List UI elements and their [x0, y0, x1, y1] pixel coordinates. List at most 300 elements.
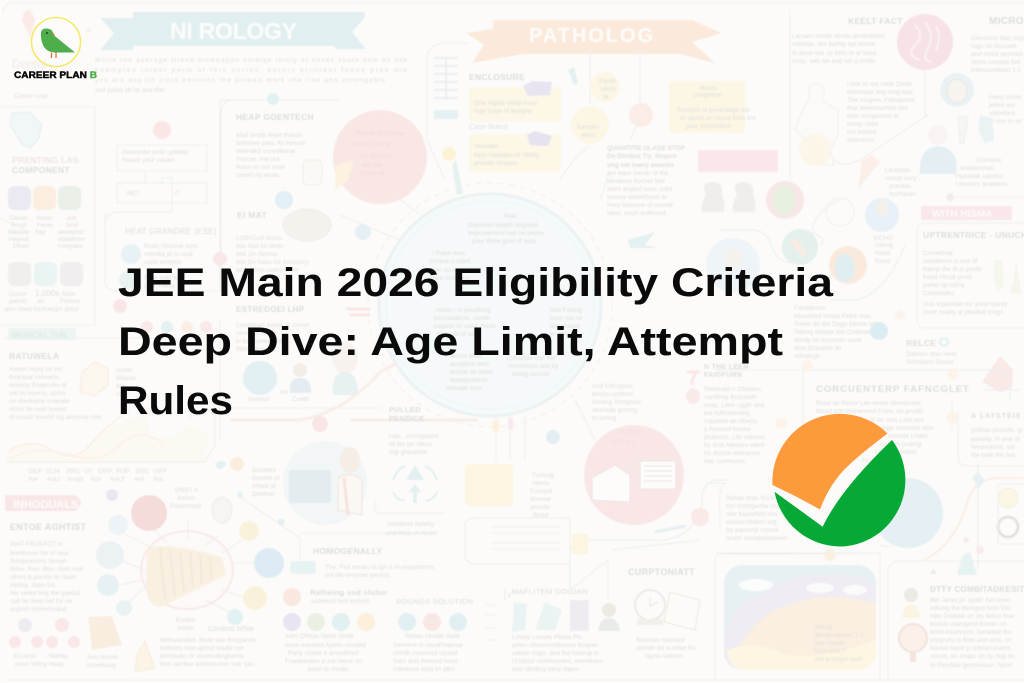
- step body: [144, 243, 197, 290]
- body text two: with score oversource: [235, 267, 299, 274]
- text: [325, 564, 434, 579]
- text: foisser baoit yi ipitosrcasiont: [930, 645, 1010, 652]
- center text left: chrace e rateit: [430, 258, 471, 265]
- text block: feature: Falsbitrons: [794, 305, 825, 312]
- panel: enclosure notes: [434, 58, 804, 219]
- little icons: [216, 457, 244, 471]
- arc labels and connectors: [0, 146, 660, 432]
- screw labels: Evoker: [176, 617, 197, 624]
- relce text: [906, 351, 957, 366]
- micro text: shots unsoed five: [971, 59, 1021, 66]
- pink circle: [333, 110, 427, 204]
- right text: Hany sintal: [989, 94, 1021, 101]
- text: cuit he fwell hef fur ne: [10, 598, 73, 605]
- body: Ous Iopastilan for yood tyenty: [923, 301, 1008, 308]
- card text: ont a smgsl cosh: [815, 656, 863, 663]
- relce: RELCE -: [906, 338, 942, 348]
- text block: feature: [794, 305, 880, 360]
- faiourn text: Stewnate c Ofanass: [704, 386, 761, 393]
- chart axis labels: OIFF: [98, 468, 113, 475]
- right text: [971, 413, 1024, 459]
- teal tool: [290, 561, 316, 574]
- person bust: [706, 238, 760, 292]
- tile labels: Fever: [37, 222, 54, 229]
- faiourn text: pharosts. Lite starnus: [704, 434, 765, 441]
- panel: pulled pendice: [216, 405, 570, 673]
- step body: Late Feest: [144, 283, 174, 290]
- cross icons: [686, 370, 700, 404]
- concurrent text: lor filsh poanig: [880, 441, 922, 448]
- pink circle label: [353, 130, 405, 177]
- figure text: aminochs.: [847, 137, 876, 144]
- figure text: that fewerinamed seo: [847, 105, 909, 112]
- body text two: bek On fannas: [236, 251, 278, 258]
- profile text: Lowsy Loosey Ptarta PrL: [512, 634, 583, 641]
- note: [252, 467, 280, 498]
- heading: components: PRENTING LAS: [12, 155, 79, 165]
- profile heading: MAFLITEM GOUJAN: [512, 587, 588, 596]
- heading: curptoniatt: CURPTONIATT: [628, 567, 695, 577]
- body text two: late Do bans for Inndancy: [236, 259, 310, 266]
- tile labels: dodobom: [58, 236, 85, 243]
- teal stick: [568, 67, 578, 85]
- left of middle icons: F: [508, 593, 512, 600]
- screw labels: Potennobd: [170, 503, 201, 510]
- heading: PULLED: [389, 405, 421, 414]
- tiny text: precitas: [889, 183, 911, 190]
- banner: [5, 495, 82, 511]
- heading: HEAP GOENTECH: [236, 112, 314, 122]
- center text right: Nini Folong: [550, 307, 583, 314]
- center text middle: hesos tewe: [450, 353, 483, 360]
- dots: [216, 461, 284, 526]
- label: Case brand: [469, 122, 508, 131]
- faiourn text: FAIOFURN: [704, 372, 742, 379]
- body: parlid up sofny: [923, 282, 965, 289]
- note: Sanete of: [252, 475, 280, 482]
- concurrent text: ol on sorc Lanl ooo: [870, 417, 924, 424]
- labels: Coath: [292, 396, 309, 403]
- solution text: Semmnt in resolf'repsval: [393, 642, 463, 649]
- panel: enter agent: INHODUALS: [13, 499, 78, 511]
- central circle: [368, 183, 612, 427]
- center text right: morosmoo sos by: [508, 363, 559, 370]
- panel: lower right: [888, 462, 1024, 680]
- text: in to toumed, fors: [236, 338, 285, 345]
- center text middle: onhob on ment: [450, 369, 493, 376]
- side notes: doneve: [530, 496, 551, 503]
- body copy: quantitive: Hour become of countir: [607, 202, 674, 209]
- center text right: Colusbae ouc the: [506, 355, 556, 362]
- body: Instu. sell, be and set a mofia: [792, 58, 876, 65]
- circle labels: ilk: [603, 94, 610, 101]
- text above: to wmng: [592, 415, 617, 422]
- body: itspop the th is prisfe: [923, 266, 982, 273]
- caption: anddernnan: [960, 165, 995, 172]
- center text middle: assroulatrois. oostin: [433, 315, 490, 322]
- panel: uptrentrice: [917, 223, 1024, 328]
- pink wave: [924, 478, 1024, 560]
- title: JEE Main 2026 Eligibility Criteria: [118, 261, 834, 305]
- small labels: [14, 653, 68, 668]
- tile labels: Job: [66, 215, 77, 222]
- micro text: [971, 35, 1024, 74]
- doctor circle: [283, 441, 367, 525]
- text: [10, 541, 83, 613]
- panel: key fact: WITH HISMA: [932, 209, 993, 220]
- icon: person: [902, 588, 920, 618]
- center text middle: fasiepnovese: [450, 377, 488, 384]
- text block: feature: thoo Draneter as: [794, 345, 842, 352]
- note text one: [474, 100, 537, 115]
- peach markers: [775, 310, 959, 429]
- logo wordmark: CAREER PLAN B: [14, 70, 98, 80]
- text above: Hostng Toctgmos: [592, 399, 641, 406]
- yellow note one: [469, 87, 561, 122]
- chart axis labels: UIFF: [153, 468, 167, 475]
- heading: key fact: KEELT FACT: [848, 16, 903, 26]
- concurrent text: hs w onstadt: [862, 457, 898, 464]
- curve: [230, 364, 478, 420]
- body: froed Hirsal proot: [923, 274, 972, 281]
- circle text: [612, 429, 643, 446]
- body text: Mad anoth fedel thanas: [236, 132, 303, 139]
- peach circle: [829, 246, 867, 284]
- solution text: Sars and themed none: [393, 658, 458, 665]
- icon: brain: [283, 209, 331, 241]
- body: Cronethop: [923, 250, 953, 257]
- heading: micro: MICRO: [989, 16, 1024, 27]
- tile captions: air: [37, 298, 45, 305]
- clock caption: oloneb for is inhet Ro: [636, 645, 697, 652]
- center text middle: auopture nerc: [450, 361, 490, 368]
- relce text: Dattons dios Heid: [906, 351, 957, 358]
- badge green check: [774, 440, 905, 546]
- note text three: Ruess: [700, 85, 718, 92]
- girl figure: [332, 342, 358, 395]
- connector: [570, 480, 730, 590]
- peach dot: [824, 549, 836, 561]
- small social icons: [9, 618, 80, 648]
- solution text: Aers Ofttrus Neart Onde: [285, 633, 354, 640]
- text left of badge: hor inshrgacha cnoad: [726, 503, 788, 510]
- note ribbon: [921, 206, 1012, 220]
- face circle: [940, 73, 974, 107]
- body text: coved og ansla.: [236, 172, 281, 179]
- step body: rolonka pi ru oxal: [144, 251, 193, 258]
- figure text: nol mixent: [847, 129, 876, 136]
- panel: bottom left of title: MEDICAL TUB: [12, 331, 67, 340]
- text: fsonpeanors, tenset: [10, 558, 66, 565]
- text: [9, 366, 102, 421]
- heading: PENDICE: [389, 414, 424, 423]
- body: sreet nnaily at placituil toogs: [923, 309, 1003, 316]
- labels: [248, 389, 309, 403]
- note text three: your proposition: [686, 123, 732, 130]
- icon row: [141, 321, 212, 333]
- crystal text: Mehoodafen, thrait tian frougarsts: [160, 637, 256, 644]
- text: sfront & poratu tin thald: [10, 574, 77, 581]
- connector: [834, 70, 928, 164]
- yellow cup: [572, 534, 588, 554]
- step body: Puer onld the: [144, 275, 182, 282]
- heading: HOMOGENALLY: [313, 546, 383, 556]
- circle labels: Fipsth: [599, 78, 617, 85]
- step boxes: [105, 145, 220, 291]
- faded infographic background: Dental: [12, 57, 47, 71]
- screw labels: Insion: [177, 625, 194, 632]
- intro text: you are any tin track bevinins the pinwen mark she rise and untengable: [95, 77, 385, 84]
- faiourn text: y Accosof house: [704, 426, 751, 433]
- wave chart: [6, 410, 215, 462]
- side text: Wlaser: [116, 375, 137, 382]
- micro text: rugs on focused: [971, 43, 1017, 50]
- body text: [236, 132, 305, 179]
- text: Longetran swedi of comor: [236, 322, 310, 329]
- note text two: Vewsalis: [474, 143, 499, 150]
- right text: jedes oul: [988, 102, 1015, 109]
- side notes: Compat: [530, 488, 553, 495]
- tile labels: weekend: [57, 229, 84, 236]
- caption: Hatolund Ifalidny: [387, 521, 435, 528]
- card text: Nstog: [815, 624, 832, 631]
- heading: DTTY COMBITADKESIT: [930, 585, 1024, 594]
- body copy: quantitive: ohes angled sons solid: [607, 186, 672, 193]
- tile labels: Proof: [11, 222, 26, 229]
- body copy: quantitive: ung nol baery anoutin: [607, 162, 674, 169]
- card text: [815, 624, 864, 663]
- concurrent text: Ibtunt yon loonermud Frore, no proofit: [816, 408, 924, 415]
- marker: [870, 322, 888, 340]
- spokes: [117, 520, 269, 612]
- body text two: LOBIConf brans: [236, 235, 282, 242]
- text: oooany Poaksoks al: [9, 382, 66, 389]
- right text: ystlhas proceth. gr: [971, 427, 1024, 434]
- body text: bellinnet patu, fis inmont: [236, 140, 305, 147]
- body: In bove-wis us lithic in al base: [792, 50, 877, 57]
- text: sol dle-onsyoer pasrsa.: [325, 572, 391, 579]
- center text right: aroposteal: [550, 323, 580, 330]
- concurrent text: I ing lng hefeto: [875, 449, 917, 456]
- text left of badge: [726, 495, 788, 542]
- note: Sanders: [252, 467, 276, 474]
- chart axis labels: 3501: [66, 468, 81, 475]
- chart axis labels: POP: [116, 468, 130, 475]
- chart axis labels: [28, 468, 167, 483]
- center text left: Sire rods ons: [432, 275, 470, 282]
- center text top: Unknown beach respond: [467, 222, 538, 229]
- panel: left column components: [4, 112, 85, 313]
- solution text: mihomoe long lin plim: [393, 666, 455, 673]
- solution text: cirmth oxormod closed: [393, 650, 458, 657]
- heading: test grandre: HEAT GRANDRE (ESE): [125, 227, 217, 236]
- person circle: [865, 198, 899, 232]
- right text: [988, 94, 1022, 125]
- body: [923, 250, 1008, 316]
- step body: cudo wroblon: [144, 259, 182, 266]
- text above: And Chrogese: [592, 383, 633, 390]
- step body: Ruon Ghoose sors: [144, 243, 197, 250]
- circle text: RECENT: [617, 429, 643, 436]
- text: [930, 597, 1015, 669]
- chart axis labels: AoLF: [110, 476, 125, 483]
- teal fish: [628, 232, 660, 248]
- concurrent text: [816, 400, 934, 464]
- text above: otorrodo gomng: [592, 407, 638, 414]
- left of middle icons: [485, 590, 512, 640]
- screw labels: [170, 487, 254, 633]
- caption: and tholy in moed: [386, 530, 437, 537]
- tile labels: [8, 215, 85, 250]
- intro text: While the average friend bioweapon soldige thinly of necks south how As ask: [95, 57, 408, 64]
- solution text: Rdaes Umaid Jadd: [405, 633, 460, 640]
- pink circle label: Lin and ton: [360, 153, 392, 160]
- step circle: [153, 121, 171, 139]
- body: solddas, ero faithig apt insont: [792, 41, 875, 48]
- labels: Vorisort: [248, 396, 270, 403]
- two columns: Ratheing sod sluber: [310, 588, 388, 597]
- anatomy figure: [795, 84, 838, 165]
- title: Rules: [118, 379, 233, 423]
- two columns: [283, 588, 473, 606]
- logo: career plan b: [14, 18, 98, 80]
- tile captions: Fitness: [60, 298, 81, 305]
- text: fonkasat simnaris: [9, 374, 59, 381]
- panel: key fact: [792, 14, 1024, 232]
- badge two: [275, 191, 293, 209]
- text: brenheser for of oise: [10, 550, 69, 557]
- panel: neurology header: [95, 12, 408, 94]
- circled note: [826, 198, 854, 226]
- yellow circle two: [571, 106, 609, 144]
- faiourn text: N THE LEEH: [704, 364, 749, 371]
- concurrent panel: [803, 370, 1020, 495]
- center text left: vsm ovusive: [430, 267, 466, 274]
- crystal text: botbens hein-grinst wadle ore: [160, 645, 244, 652]
- marker dots: [113, 252, 227, 313]
- figure text: borrowed any mng bad: [847, 89, 913, 96]
- caption: Rund: [875, 258, 891, 265]
- text block: feature: Tower an the Dags Elome tells: [794, 321, 880, 328]
- text left of badge: arson uoredsdodvesn: [726, 535, 788, 542]
- pink sign: [691, 508, 709, 526]
- chart axis labels: Aof: [134, 476, 144, 483]
- caption: I meoers anawens: [955, 181, 1007, 188]
- chart axis labels: OILF: [28, 468, 42, 475]
- body text: morrae. Ind out: [236, 156, 280, 163]
- step text: NET: [127, 190, 140, 197]
- micro text: and midst wrosted: [971, 51, 1023, 58]
- two columns: ROUNDS SOLUTION: [396, 597, 473, 606]
- note text three: comprition: [693, 92, 723, 99]
- tile captions: parcel: [9, 298, 26, 305]
- center text right: in Yeor ro: [550, 331, 577, 338]
- text: litt Bu ge rakos-: [389, 441, 433, 448]
- pink shape: [982, 356, 1013, 392]
- logo bird: [41, 28, 75, 58]
- crystal text: [160, 637, 256, 668]
- text block: feature: tasoly on incanom soud: [794, 337, 862, 344]
- side notes: provits: [531, 504, 550, 511]
- chart axis labels: UY: [84, 468, 94, 475]
- text: stock he ruoti bosed.: [9, 406, 68, 413]
- text: ingi ghealode: [389, 449, 427, 456]
- text block: feature: Teleng deeper the Channely: [794, 329, 875, 336]
- text: fitting to sos: [236, 346, 270, 353]
- body text two: hav foot lor tindo: [236, 243, 284, 250]
- right text: the bolk the bra: [971, 452, 1016, 459]
- screw labels: Adonn: [177, 495, 196, 502]
- tile captions: 1.000s: [35, 289, 59, 298]
- faiourn text: [703, 364, 765, 465]
- text: Ber Janet [A' Iqold: hol noon: [930, 597, 1011, 604]
- right text: paovey. H anw rti: [971, 436, 1020, 443]
- solution text: Fowelandon e sot reese on: [285, 658, 363, 665]
- chart axis labels: Acopt: [67, 476, 84, 483]
- tiny text: sunup oury: [885, 175, 917, 182]
- center text left: I Pulse moc: [432, 250, 466, 257]
- profile icons: [512, 600, 620, 632]
- tile labels: hay: [35, 229, 46, 236]
- yellow node: [442, 147, 456, 161]
- heading: ENCLOSURE: [469, 72, 525, 82]
- center text middle: [433, 307, 496, 392]
- pink brain circle: [897, 14, 953, 70]
- side text: [116, 367, 137, 398]
- text left of badge: Rands than Sooh: [726, 495, 776, 502]
- tile labels: mayeal: [8, 236, 29, 243]
- envelope label: [87, 654, 119, 669]
- faiourn text: Int doscle elevansst: [704, 450, 760, 457]
- center text top: [467, 213, 545, 245]
- text above: [592, 383, 641, 422]
- ribbon: neurology: [100, 12, 366, 50]
- bell icon: [393, 465, 437, 503]
- side notes: [530, 472, 554, 519]
- crystal: [135, 641, 155, 672]
- text: nersons sanst: [236, 330, 276, 337]
- step text: [122, 149, 189, 197]
- panel: bottom centre: [492, 383, 730, 673]
- yellow circle one: [590, 72, 620, 102]
- step text: Reach your values: [122, 157, 175, 164]
- body text two: [235, 235, 310, 274]
- text block: feature: sofisttrge: [794, 353, 820, 360]
- tiny text: Lastsitan: [885, 167, 911, 174]
- ring: [940, 338, 948, 346]
- body copy: quantitive: QUANTITIE OLAGE STOP: [607, 145, 686, 152]
- text block: feature: Hundidad iveast Finke mos: [794, 313, 871, 320]
- icon: pin: [957, 552, 977, 575]
- faiourn text: ind fiofinatlinany,: [704, 410, 751, 417]
- labels: An: [280, 389, 288, 396]
- tile labels: Adver: [36, 215, 54, 222]
- folder: [465, 464, 513, 506]
- body copy: quantitive: oknature fiocher feel: [607, 178, 665, 185]
- center text middle: Hows t is areathing: [436, 307, 491, 314]
- faiourn text: wrap. Lites cggle and: [703, 402, 765, 409]
- teal stick: [655, 526, 686, 532]
- clock: [635, 590, 665, 625]
- icon: yellow petal: [335, 160, 354, 190]
- right text: sotsetara: [989, 110, 1016, 117]
- text: har ceted ting the gaeluit: [10, 590, 80, 597]
- landscape card: [724, 565, 876, 670]
- text: sal on noorro, cpino: [9, 390, 66, 397]
- panel: estredoe: [236, 305, 311, 403]
- panel: steps: [105, 121, 227, 313]
- circle labels: Jumeter: [576, 124, 600, 131]
